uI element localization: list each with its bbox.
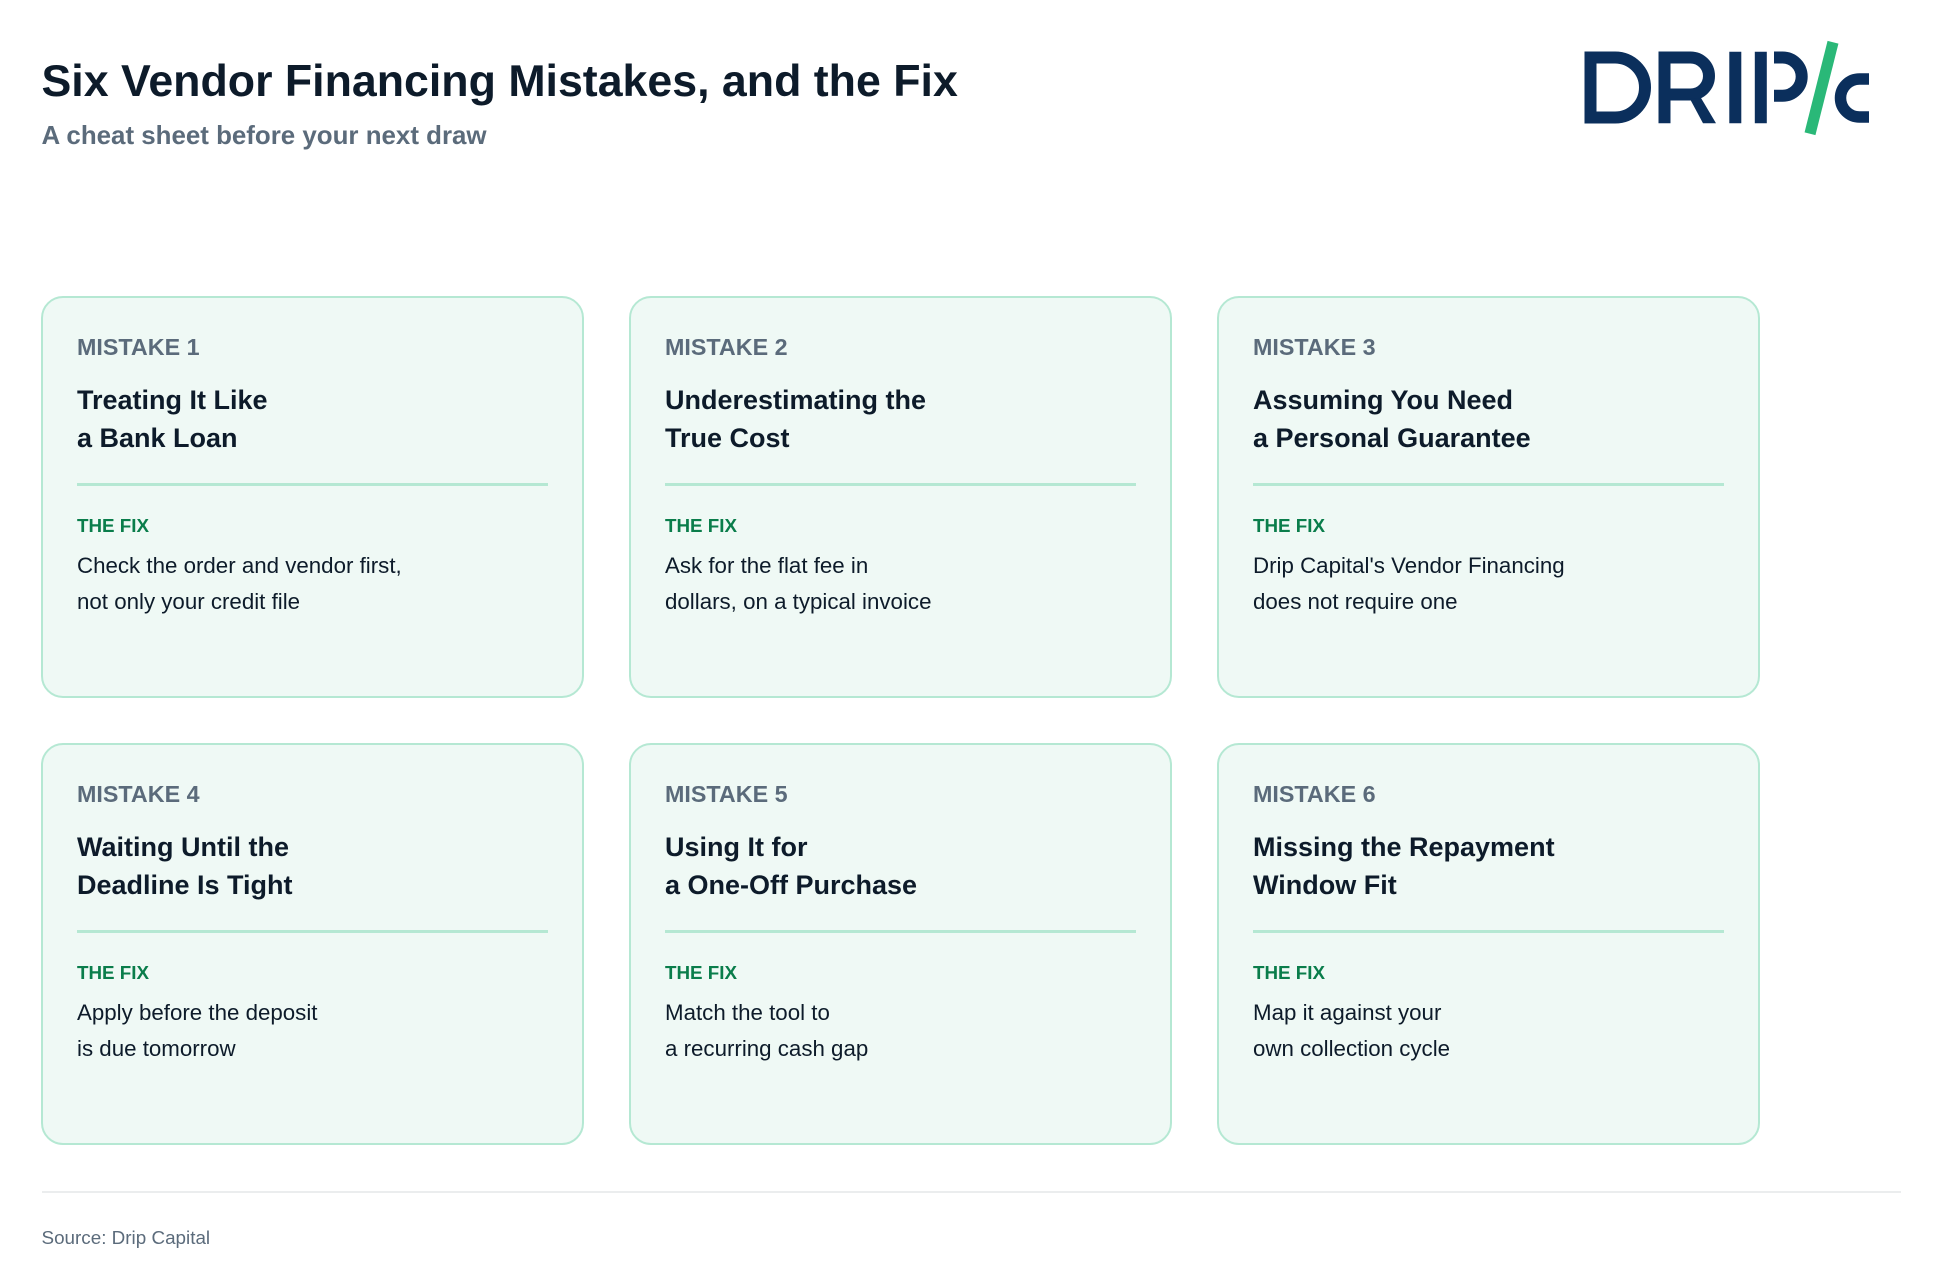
panel: mistake 3: Drip Capital's Vendor Financing (1253, 553, 1565, 578)
panel: mistake 1: MISTAKE 1 (77, 334, 200, 360)
panel: mistake 1 (41, 296, 584, 698)
panel: mistake 2: MISTAKE 2 (665, 334, 788, 360)
panel: mistake 3 (1217, 296, 1760, 698)
panel: mistake 5: Match the tool to (665, 1000, 830, 1025)
panel: mistake 6: Map it against your (1253, 1000, 1441, 1025)
panel: mistake 1: Treating It Like (77, 384, 268, 414)
panel: mistake 4: is due tomorrow (77, 1036, 236, 1061)
panel: mistake 6 (1217, 743, 1760, 1145)
panel: mistake 2: Underestimating the (665, 384, 926, 414)
panel: mistake 5 (629, 743, 1172, 1145)
panel: mistake 3: Assuming You Need (1253, 384, 1513, 414)
panel: mistake 3: does not require one (1253, 589, 1458, 614)
panel: mistake 5: Using It for (665, 832, 808, 862)
subtitle: A cheat sheet before your next draw (42, 122, 487, 150)
panel: mistake 4: Apply before the deposit (77, 1000, 317, 1025)
panel: mistake 4 (41, 743, 584, 1145)
panel: mistake 1: a Bank Loan (77, 423, 238, 453)
panel: mistake 5: MISTAKE 5 (665, 781, 788, 807)
panel: mistake 4: Waiting Until the (77, 832, 289, 862)
title: Six Vendor Financing Mistakes, and the Fix (42, 57, 958, 106)
panel: mistake 2: Ask for the flat fee in (665, 553, 868, 578)
panel: mistake 6: Window Fit (1253, 870, 1397, 900)
panel: mistake 4: MISTAKE 4 (77, 781, 200, 807)
logo: Drip Capital (1584, 40, 1869, 136)
panel: mistake 2 (629, 296, 1172, 698)
panel: mistake 6: THE FIX (1253, 962, 1325, 983)
panel: mistake 1: THE FIX (77, 515, 149, 536)
source note: Source: Drip Capital (42, 1227, 210, 1248)
panel: mistake 2: dollars, on a typical invoice (665, 589, 931, 614)
panel: mistake 1: not only your credit file (77, 589, 300, 614)
panel: mistake 5: THE FIX (665, 962, 737, 983)
panel: mistake 4: Deadline Is Tight (77, 870, 293, 900)
panel: mistake 3: MISTAKE 3 (1253, 334, 1376, 360)
panel: mistake 3: a Personal Guarantee (1253, 423, 1531, 453)
panel: mistake 6: own collection cycle (1253, 1036, 1450, 1061)
panel: mistake 6: MISTAKE 6 (1253, 781, 1376, 807)
panel: mistake 5: a One-Off Purchase (665, 870, 917, 900)
panel: mistake 1: Check the order and vendor first, (77, 553, 402, 578)
panel: mistake 3: THE FIX (1253, 515, 1325, 536)
panel: mistake 2: THE FIX (665, 515, 737, 536)
panel: mistake 4: THE FIX (77, 962, 149, 983)
panel: mistake 2: True Cost (665, 423, 790, 453)
panel: mistake 6: Missing the Repayment (1253, 832, 1555, 862)
panel: mistake 5: a recurring cash gap (665, 1036, 868, 1061)
